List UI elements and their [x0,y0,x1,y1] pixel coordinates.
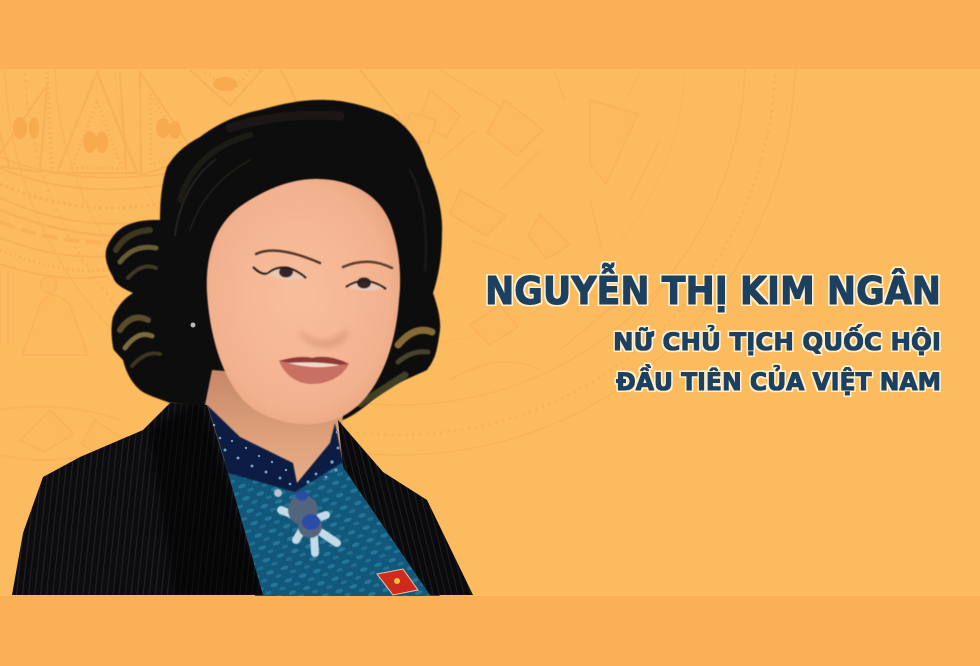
mouth [279,357,349,384]
drum figures [64,102,618,446]
delegate badge [377,569,418,595]
blouse [222,455,440,596]
left eye [253,266,306,280]
subtitle line 2: ĐẦU TIÊN CỦA VIỆT NAM [616,363,941,396]
subtitle line 1: NỮ CHỦ TỊCH QUỐC HỘI [613,323,941,356]
brooch [274,489,337,553]
nose [298,328,348,348]
hair curl highlights [116,115,432,404]
portrait [12,100,473,596]
hair [106,100,442,420]
top band [0,0,980,69]
bronze drum background pattern [0,69,681,446]
neck [205,370,345,490]
jacket shadow fold [150,400,262,595]
drum triangle seeds [13,77,237,153]
infographic canvas [0,69,980,596]
beaded collar [207,405,343,492]
name heading: NGUYỄN THỊ KIM NGÂN [485,264,941,313]
earring [190,322,196,328]
title text block [485,264,941,396]
main panel background [0,69,980,596]
face [190,179,400,424]
left eyebrow [256,251,320,263]
bottom band [0,596,980,666]
right eyebrow [343,262,392,268]
drum rings [0,156,164,279]
right eye [346,278,386,291]
jacket [12,400,473,595]
drum triangles [0,70,420,175]
